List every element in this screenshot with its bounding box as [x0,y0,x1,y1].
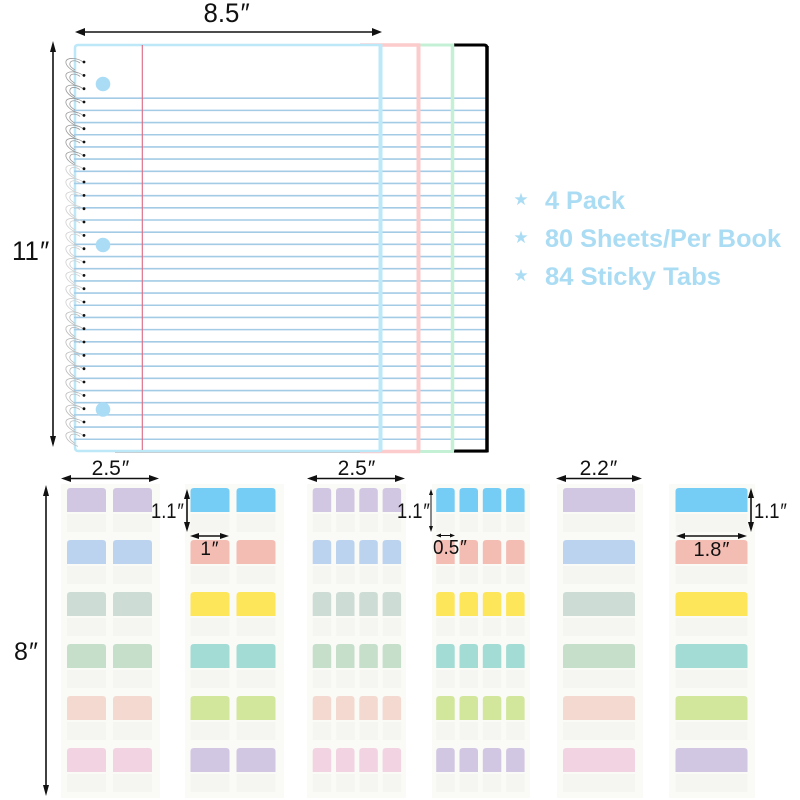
blue front sheet [75,45,380,451]
tab sheet 3: pastel four columns [307,484,406,798]
green sheet [400,45,452,452]
feature list [513,187,781,291]
width dimension 8.5 [75,0,382,36]
tab sheet 2: bright two columns [185,484,284,798]
tab height dimension 1.1 sheet 6 [748,488,787,532]
notebook [66,44,487,453]
height dimension 8: 8″ [14,638,38,666]
tab sheet 1: pastel two columns [61,484,160,798]
width dimension 2.5 sheet 1 [61,457,159,482]
width dimension 2.2 sheet 5 [556,457,642,482]
width dimension 2.5 sheet 3 [307,457,405,482]
tab height dimension 1.1 sheet 2 [151,489,190,532]
width dimension 2.5 sheet 3: 2.5″ [338,457,376,480]
spiral binding [66,58,85,446]
tab width dimension 1 sheet 2 [190,533,229,560]
tab sheet 4: bright four columns [432,484,530,798]
tab width dimension 1.8 sheet 6: 1.8″ [694,539,729,561]
punch holes [96,77,110,417]
tab width dimension 0.5 sheet 4: 0.5″ [433,537,467,559]
tab width dimension 1 sheet 2: 1″ [200,539,219,560]
red margin line [141,45,143,450]
tab width dimension 1.8 sheet 6 [676,533,747,561]
tab sheet 6: bright single column [669,484,755,798]
tab height dimension 1.1 sheet 2: 1.1″ [151,500,184,523]
ruled lines [74,97,486,440]
feature: 84 sticky tabs: 84 Sticky Tabs [545,263,721,291]
sheet edges over lines [378,44,382,451]
tab sheet 5: pastel single column [557,484,643,798]
width dimension 2.2 sheet 5: 2.2″ [580,457,618,480]
tab height dimension 1.1 sheet 6: 1.1″ [754,500,787,523]
shadow under notebook [115,451,487,453]
height dimension 8 [14,485,49,796]
feature: 84 sticky tabs: ★ [513,266,529,285]
tab height dimension 1.1 sheet 4: 1.1″ [397,500,430,523]
height dimension 11: 11″ [12,236,49,266]
width dimension 2.5 sheet 1: 2.5″ [92,457,130,480]
feature: 4 pack: ★ [513,190,529,209]
feature: 4 pack: 4 Pack [545,187,625,215]
black back sheet [440,45,487,451]
pink sheet [360,45,418,452]
height dimension 11 [12,41,56,447]
tab height dimension 1.1 sheet 4 [397,489,433,532]
feature: 80 sheets: ★ [513,228,529,247]
feature: 80 sheets: 80 Sheets/Per Book [545,225,781,253]
